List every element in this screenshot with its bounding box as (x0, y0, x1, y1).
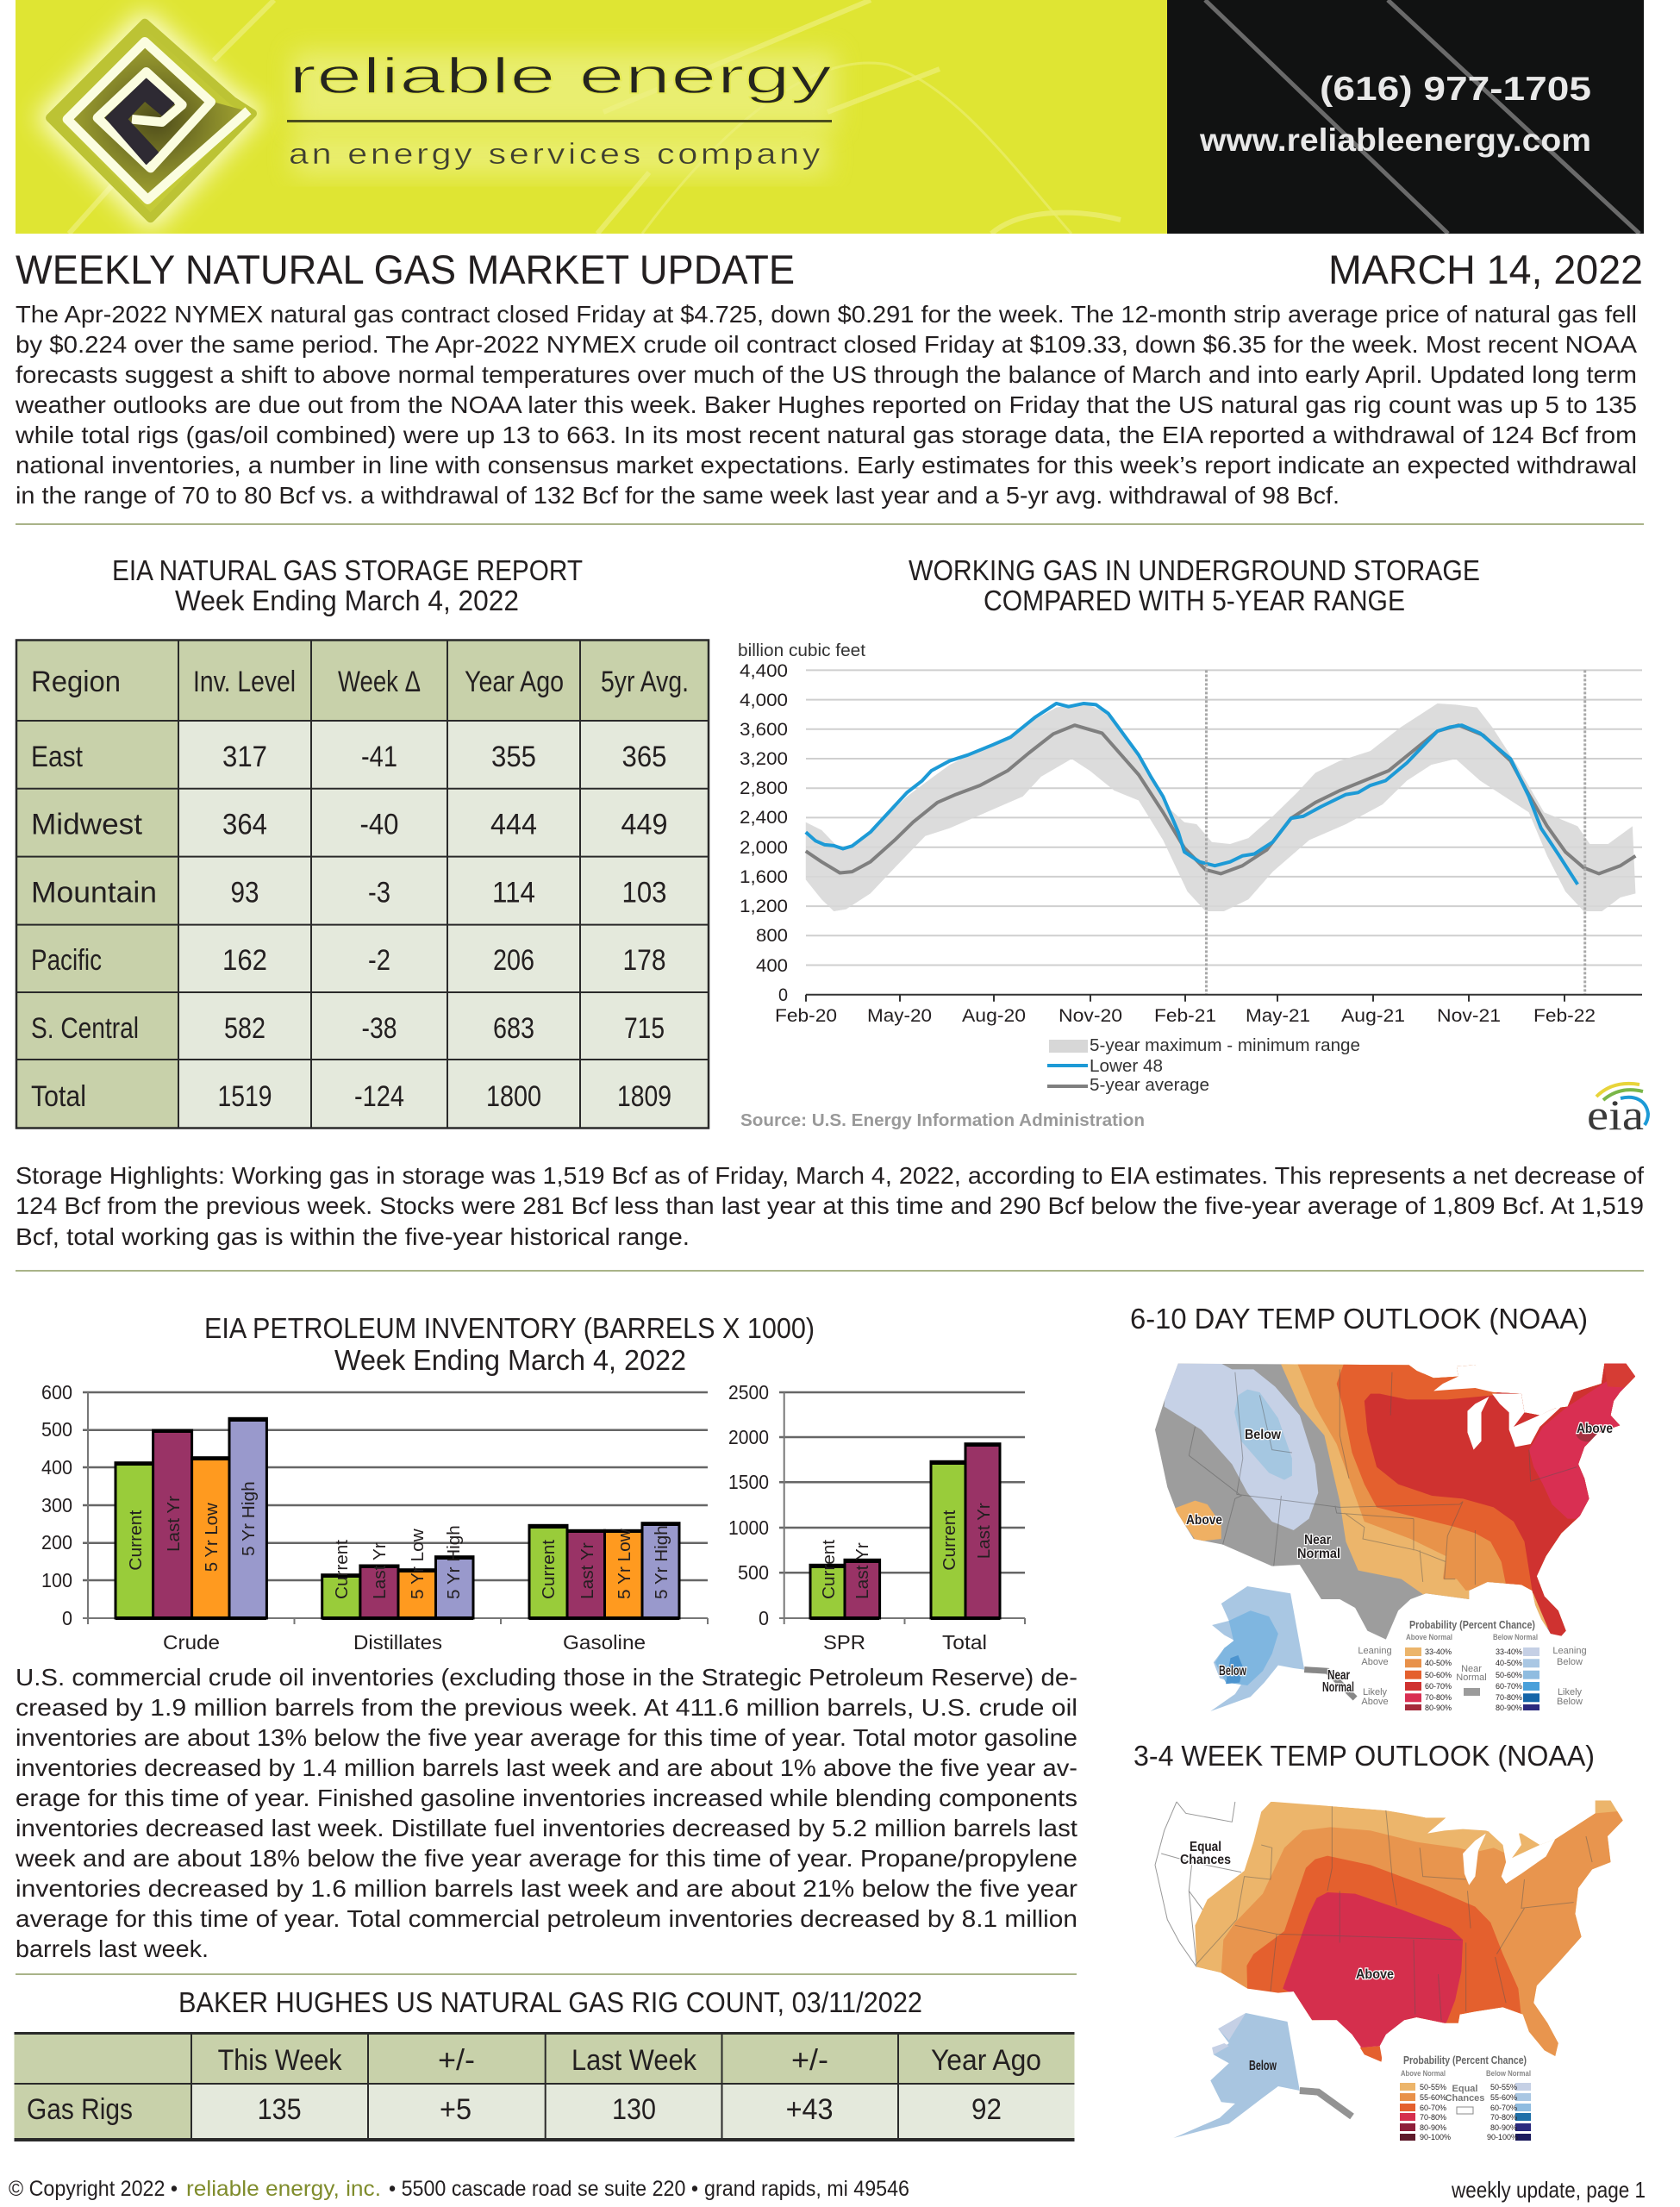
map legend: 80-90% (1496, 1704, 1522, 1712)
petroleum inventory paragraph: week and are about 18% below the five year average for this time of year. Propane/propylene (15, 1845, 1077, 1872)
category labels: Crude (163, 1631, 220, 1654)
row: S. Central: 715 (624, 1012, 665, 1045)
rig table row: 130 (612, 2093, 656, 2126)
table header row: Region (31, 666, 121, 698)
y-axis labels: 600 (41, 1381, 72, 1404)
row: Pacific: Pacific (31, 944, 102, 977)
map legend: 50-55% (1420, 2083, 1446, 2091)
row: Mountain: 114 (492, 876, 535, 909)
table header row: Inv. Level (193, 666, 296, 698)
rig table header: Last Week (571, 2044, 697, 2077)
heading: 3-4 week outlook: 3-4 WEEK TEMP OUTLOOK (NOAA) (1134, 1740, 1595, 1772)
bar labels: 5 Yr Low (203, 1503, 222, 1572)
line chart: working gas in storage (738, 641, 1648, 1139)
map labels: Below (1249, 2059, 1277, 2073)
row: East: 365 (622, 741, 667, 773)
chart legend: 5-year maximum - minimum range (1090, 1036, 1360, 1055)
map legend: Below Normal (1493, 1633, 1538, 1641)
row: Total: Total (31, 1080, 86, 1113)
map labels (1186, 1422, 1613, 1695)
row: Midwest: -40 (360, 809, 398, 841)
heading: storage report (112, 554, 583, 616)
rig table header: +/- (791, 2044, 828, 2077)
chart x-axis labels: Feb-20 (775, 1006, 837, 1026)
intro paragraph: by $0.224 over the same period. The Apr-2022 NYMEX crude oil contract closed Friday at $109.33, down $6.35 for the week. Most recent NOAA (16, 331, 1637, 358)
chart y-axis unit: billion cubic feet (738, 641, 865, 660)
5-year range band and data lines (806, 670, 1635, 994)
map legend: 33-40% (1425, 1647, 1452, 1656)
bar labels: Last Yr (853, 1542, 872, 1599)
petroleum inventory paragraph: inventories are about 13% below the five year average for this time of year. Total motor gasoline (16, 1724, 1077, 1751)
map legend: 60-70% (1496, 1682, 1522, 1691)
rig table row: +43 (786, 2093, 834, 2126)
petroleum inventory paragraph: barrels last week. (16, 1935, 209, 1962)
row: S. Central (31, 1012, 665, 1045)
bar labels: Current (540, 1540, 559, 1599)
footer (9, 2177, 909, 2201)
intro paragraph: forecasts suggest a shift to above normal temperatures over much of the US through the balance of March and into early April. Updated long term (16, 361, 1637, 388)
map legend: Normal (1456, 1672, 1487, 1683)
category labels: SPR (823, 1631, 865, 1654)
map labels: Above (1186, 1513, 1222, 1528)
map legend: Equal (1452, 2084, 1477, 2094)
rig table row: 135 (258, 2093, 302, 2126)
petroleum inventory paragraph: inventories decreased by 1.4 million barrels last week and are about 1% above the five year av- (16, 1754, 1077, 1781)
heading: working gas chart: COMPARED WITH 5-YEAR RANGE (984, 585, 1405, 616)
footer: © Copyright 2022 • (9, 2177, 178, 2201)
map legend: 60-70% (1425, 1682, 1452, 1691)
category labels: Total (942, 1631, 987, 1654)
rig table row: Gas Rigs (27, 2093, 133, 2126)
chart legend: 5-year average (1090, 1076, 1209, 1095)
map legend (1400, 2054, 1531, 2141)
map legend: 60-70% (1490, 2104, 1517, 2112)
rig table row (27, 2093, 1002, 2126)
bar chart: crude, distillates, gasoline (41, 1381, 708, 1654)
chart x-axis labels: May-21 (1246, 1006, 1310, 1026)
bar labels (820, 1503, 994, 1599)
map labels: Above (1577, 1422, 1613, 1436)
intro paragraph: national inventories, a number in line with consensus market expectations. Early estimates for this week’s report indicate an expected withdrawal (16, 452, 1637, 478)
y-axis labels: 2000 (728, 1426, 769, 1448)
map legend: Below Normal (1486, 2069, 1531, 2078)
map legend: 55-60% (1420, 2093, 1446, 2102)
map legend: 80-90% (1420, 2123, 1446, 2132)
category labels: Gasoline (563, 1631, 646, 1654)
chart y-axis labels: 1,600 (740, 867, 788, 887)
chart y-axis labels: 3,600 (740, 720, 788, 740)
chart x-axis labels: Nov-20 (1059, 1006, 1122, 1026)
map legend (1358, 1618, 1587, 1712)
petroleum inventory paragraph: average for this time of year. Total commercial petroleum inventories decreased by 8.1 million (16, 1905, 1077, 1932)
row: S. Central: 683 (493, 1012, 534, 1045)
bar labels: Last Yr (165, 1496, 184, 1552)
petroleum inventory paragraph: erage for this time of year. Finished gasoline inventories increased while blending components (16, 1785, 1077, 1811)
row: Pacific: 206 (493, 944, 534, 977)
heading: storage report: Week Ending March 4, 2022 (175, 585, 519, 616)
rig table header: This Week (218, 2044, 342, 2077)
row: Midwest: 449 (621, 809, 667, 841)
map labels: Above (1356, 1967, 1394, 1982)
logo wordmark: reliable energy (289, 48, 832, 104)
map labels: Normal (1297, 1547, 1340, 1561)
rig table header (218, 2044, 1041, 2077)
y-axis labels: 300 (41, 1494, 72, 1516)
table header row (31, 666, 689, 698)
heading: petroleum inventory: Week Ending March 4, 2022 (334, 1344, 686, 1376)
bar labels: 5 Yr Low (409, 1529, 428, 1599)
map legend: 80-90% (1490, 2123, 1517, 2132)
bar labels (127, 1481, 671, 1599)
map legend: Above Normal (1401, 2069, 1446, 2078)
map legend: Leaning (1358, 1646, 1392, 1656)
map: 3-4 week temperature outlook (1155, 1793, 1660, 2141)
storage highlights text: 124 Bcf from the previous week. Stocks were 281 Bcf less than last year at this time and 290 Bcf below the five-year average of 1,809 Bcf. At 1,519 (16, 1192, 1644, 1219)
row: East: East (31, 741, 83, 773)
chart x-axis labels: Aug-21 (1341, 1006, 1405, 1026)
heading: petroleum inventory (204, 1312, 815, 1376)
map legend: 70-80% (1420, 2113, 1446, 2122)
chart x-axis labels: Feb-22 (1533, 1006, 1596, 1026)
date: MARCH 14, 2022 (1328, 247, 1643, 292)
map legend: Likely (1363, 1687, 1388, 1697)
y-axis labels (728, 1381, 769, 1629)
intro paragraph: in the range of 70 to 80 Bcf vs. a withdrawal of 132 Bcf for the same week last year and a 5-yr avg. withdrawal of 98 Bcf. (16, 482, 1340, 509)
table: rig count (14, 2033, 1074, 2140)
y-axis labels: 400 (41, 1456, 72, 1479)
heading: working gas chart (909, 554, 1480, 616)
row: Total: 1519 (217, 1080, 272, 1113)
chart x-axis labels (775, 1006, 1596, 1026)
logo tagline: an energy services company (289, 138, 823, 171)
page number: weekly update, page 1 (1451, 2177, 1646, 2203)
Alaska (1173, 2013, 1352, 2138)
bar labels: 5 Yr High (240, 1481, 259, 1556)
y-axis labels: 1500 (728, 1471, 769, 1493)
map legend: 90-100% (1487, 2133, 1518, 2141)
table header row: Week Δ (338, 666, 421, 698)
chart legend: Lower 48 (1090, 1057, 1163, 1076)
y-axis labels: 100 (41, 1569, 72, 1591)
map legend: Likely (1558, 1687, 1583, 1697)
chart x-axis labels: Feb-21 (1154, 1006, 1216, 1026)
row: Midwest (31, 809, 667, 841)
title: WEEKLY NATURAL GAS MARKET UPDATE (16, 247, 795, 292)
rig table header: +/- (438, 2044, 475, 2077)
heading: 6-10 day outlook: 6-10 DAY TEMP OUTLOOK (NOAA) (1130, 1303, 1588, 1335)
bar labels: Current (940, 1510, 959, 1571)
table: EIA storage report (16, 640, 709, 1128)
map labels (1180, 1840, 1394, 2073)
y-axis labels: 0 (62, 1607, 72, 1629)
Alaska (1210, 1586, 1355, 1711)
row: S. Central: 582 (224, 1012, 265, 1045)
footer: grand rapids, mi 49546 (704, 2177, 909, 2201)
map legend: 40-50% (1425, 1659, 1452, 1667)
header banner (16, 0, 1644, 234)
map: 6-10 day temperature outlook (1149, 1358, 1660, 1712)
y-axis labels: 2500 (728, 1381, 769, 1404)
chart y-axis labels: 2,400 (740, 808, 788, 828)
phone number: (616) 977-1705 (1320, 71, 1591, 108)
footer: • 5500 cascade road se suite 220 • (389, 2177, 698, 2201)
row: Total: 1800 (486, 1080, 541, 1113)
row: East: -41 (361, 741, 397, 773)
map labels: Equal (1190, 1840, 1221, 1854)
map legend: 70-80% (1490, 2113, 1517, 2122)
chart y-axis labels: 2,000 (740, 838, 788, 858)
row: Mountain: Mountain (31, 876, 157, 909)
chart y-axis labels: 1,200 (740, 897, 788, 916)
chart legend (1047, 1036, 1360, 1095)
map legend: Above (1361, 1697, 1389, 1707)
chart y-axis labels: 3,200 (740, 749, 788, 769)
icon: reliable energy spiral logo (50, 23, 253, 218)
intro paragraph: weather outlooks are due out from the NOAA later this week. Baker Hughes reported on Friday that the US natural gas rig count was up 5 to 135 (15, 391, 1637, 418)
map legend: 33-40% (1496, 1647, 1522, 1656)
website: www.reliableenergy.com (1199, 122, 1591, 158)
bar labels: 5 Yr High (445, 1525, 464, 1599)
chart source note: Source: U.S. Energy Information Administration (740, 1111, 1145, 1130)
petroleum inventory paragraph: creased by 1.9 million barrels from the previous week. At 411.6 million barrels, U.S. crude oil (16, 1694, 1077, 1721)
map legend: Probability (Percent Chance) (1403, 2054, 1527, 2066)
map legend: 70-80% (1496, 1693, 1522, 1702)
category labels (163, 1631, 646, 1654)
map legend: 60-70% (1420, 2104, 1446, 2112)
map legend: 80-90% (1425, 1704, 1452, 1712)
bars: crude (116, 1418, 266, 1618)
map labels: Near (1327, 1668, 1350, 1683)
row: Total: -124 (354, 1080, 404, 1113)
row: S. Central: S. Central (31, 1012, 139, 1045)
storage highlights text: Bcf, total working gas is within the five-year historical range. (16, 1223, 690, 1250)
map legend: Leaning (1552, 1646, 1587, 1656)
map labels: Normal (1322, 1680, 1354, 1695)
chart y-axis labels (740, 661, 788, 1005)
petroleum inventory paragraph: inventories decreased last week. Distillate fuel inventories decreased by 5.2 million barrels last (16, 1815, 1077, 1841)
map legend: Above (1361, 1657, 1389, 1667)
petroleum inventory paragraph (15, 1664, 1077, 1962)
bar labels: 5 Yr Low (615, 1529, 634, 1599)
row: Total: 1809 (617, 1080, 671, 1113)
heading: petroleum inventory: EIA PETROLEUM INVENTORY (BARRELS X 1000) (204, 1312, 815, 1344)
chart x-axis labels: Nov-21 (1437, 1006, 1501, 1026)
map legend: 50-60% (1496, 1671, 1522, 1679)
map legend: 40-50% (1496, 1659, 1522, 1667)
map legend: 90-100% (1420, 2133, 1451, 2141)
map labels: Below (1245, 1428, 1281, 1442)
row: Mountain (31, 876, 667, 909)
bar labels: Current (333, 1540, 352, 1599)
row: East: 355 (491, 741, 536, 773)
chart y-axis labels: 4,400 (740, 661, 788, 681)
rig table header: Year Ago (931, 2044, 1041, 2077)
chart y-axis labels: 800 (756, 926, 788, 946)
storage highlights text: Storage Highlights: Working gas in storage was 1,519 Bcf as of Friday, March 4, 2022, according to EIA estimates. This represents a net decrease of (16, 1162, 1644, 1189)
bar labels: 5 Yr High (653, 1525, 671, 1599)
row: Mountain: 103 (622, 876, 667, 909)
bars: distillates (322, 1557, 473, 1618)
heading: working gas chart: WORKING GAS IN UNDERGROUND STORAGE (909, 554, 1480, 586)
row: S. Central: -38 (362, 1012, 397, 1045)
bars: gasoline (529, 1523, 679, 1618)
map legend: 50-55% (1490, 2083, 1517, 2091)
y-axis labels: 1000 (728, 1516, 769, 1539)
map labels: Near (1304, 1533, 1331, 1547)
bars: total (931, 1444, 1000, 1618)
bar chart: SPR and total (728, 1381, 1025, 1654)
category labels: Distillates (353, 1631, 442, 1654)
storage highlights text (16, 1162, 1644, 1250)
row: Pacific: 178 (622, 944, 665, 977)
row: Pacific: 162 (222, 944, 267, 977)
bars: SPR (810, 1560, 880, 1618)
chart y-axis labels: 0 (778, 985, 788, 1005)
row: Midwest: 364 (222, 809, 267, 841)
table header row: Year Ago (465, 666, 564, 698)
chart y-axis labels: 4,000 (740, 691, 788, 710)
row: Pacific: -2 (368, 944, 390, 977)
rig table row: +5 (440, 2093, 472, 2126)
map labels: Chances (1180, 1853, 1231, 1867)
row: Mountain: 93 (231, 876, 259, 909)
row: Total (31, 1080, 671, 1113)
bar labels: Last Yr (371, 1542, 390, 1599)
bar labels: Current (820, 1540, 839, 1599)
row: East (31, 741, 667, 773)
row: Midwest: Midwest (31, 809, 143, 841)
bar labels: Last Yr (578, 1542, 597, 1599)
footer: reliable energy, inc. (186, 2177, 381, 2201)
map legend: Below (1557, 1697, 1583, 1707)
y-axis labels (41, 1381, 72, 1629)
map legend: Chances (1446, 2093, 1484, 2104)
chart x-axis labels: Aug-20 (962, 1006, 1026, 1026)
row: Pacific (31, 944, 665, 977)
category labels (823, 1631, 987, 1654)
chart x-axis labels: May-20 (867, 1006, 932, 1026)
y-axis labels: 500 (41, 1418, 72, 1441)
row: Mountain: -3 (368, 876, 390, 909)
y-axis labels: 200 (41, 1531, 72, 1554)
petroleum inventory paragraph: U.S. commercial crude oil inventories (excluding those in the Strategic Petroleum Reserve) de- (16, 1664, 1077, 1691)
map labels: Below (1219, 1664, 1246, 1679)
y-axis labels: 0 (759, 1607, 769, 1629)
intro paragraph: while total rigs (gas/oil combined) were up 13 to 663. In its most recent natural gas storage data, the EIA reported a withdrawal of 124 Bcf from (15, 422, 1637, 448)
heading: storage report: EIA NATURAL GAS STORAGE REPORT (112, 554, 583, 586)
row: Midwest: 444 (490, 809, 537, 841)
petroleum inventory paragraph: inventories decreased by 1.6 million barrels last week and are about 21% below the five year (16, 1875, 1077, 1902)
heading: rig count: BAKER HUGHES US NATURAL GAS RIG COUNT, 03/11/2022 (178, 1986, 922, 2018)
map legend: 50-60% (1425, 1671, 1452, 1679)
bar labels: Last Yr (975, 1503, 994, 1559)
intro paragraph: The Apr-2022 NYMEX natural gas contract closed Friday at $4.725, down $0.291 for the week. The 12-month strip average price of natural gas fell (16, 301, 1637, 328)
map legend: Near (1461, 1664, 1482, 1674)
map legend: Below (1557, 1657, 1583, 1667)
bar labels: Current (127, 1510, 146, 1571)
rig table row: 92 (971, 2093, 1002, 2126)
map legend: Probability (Percent Chance) (1409, 1618, 1535, 1631)
intro paragraph (15, 301, 1637, 509)
map legend: 70-80% (1425, 1693, 1452, 1702)
map legend: 55-60% (1490, 2093, 1517, 2102)
map legend: Above Normal (1406, 1633, 1452, 1641)
chart y-axis labels: 2,800 (740, 778, 788, 798)
row: East: 317 (222, 741, 267, 773)
y-axis labels: 500 (738, 1561, 769, 1584)
chart y-axis labels: 400 (756, 956, 788, 976)
icon: eia logo: eia (1587, 1091, 1644, 1139)
table header row: 5yr Avg. (601, 666, 689, 698)
